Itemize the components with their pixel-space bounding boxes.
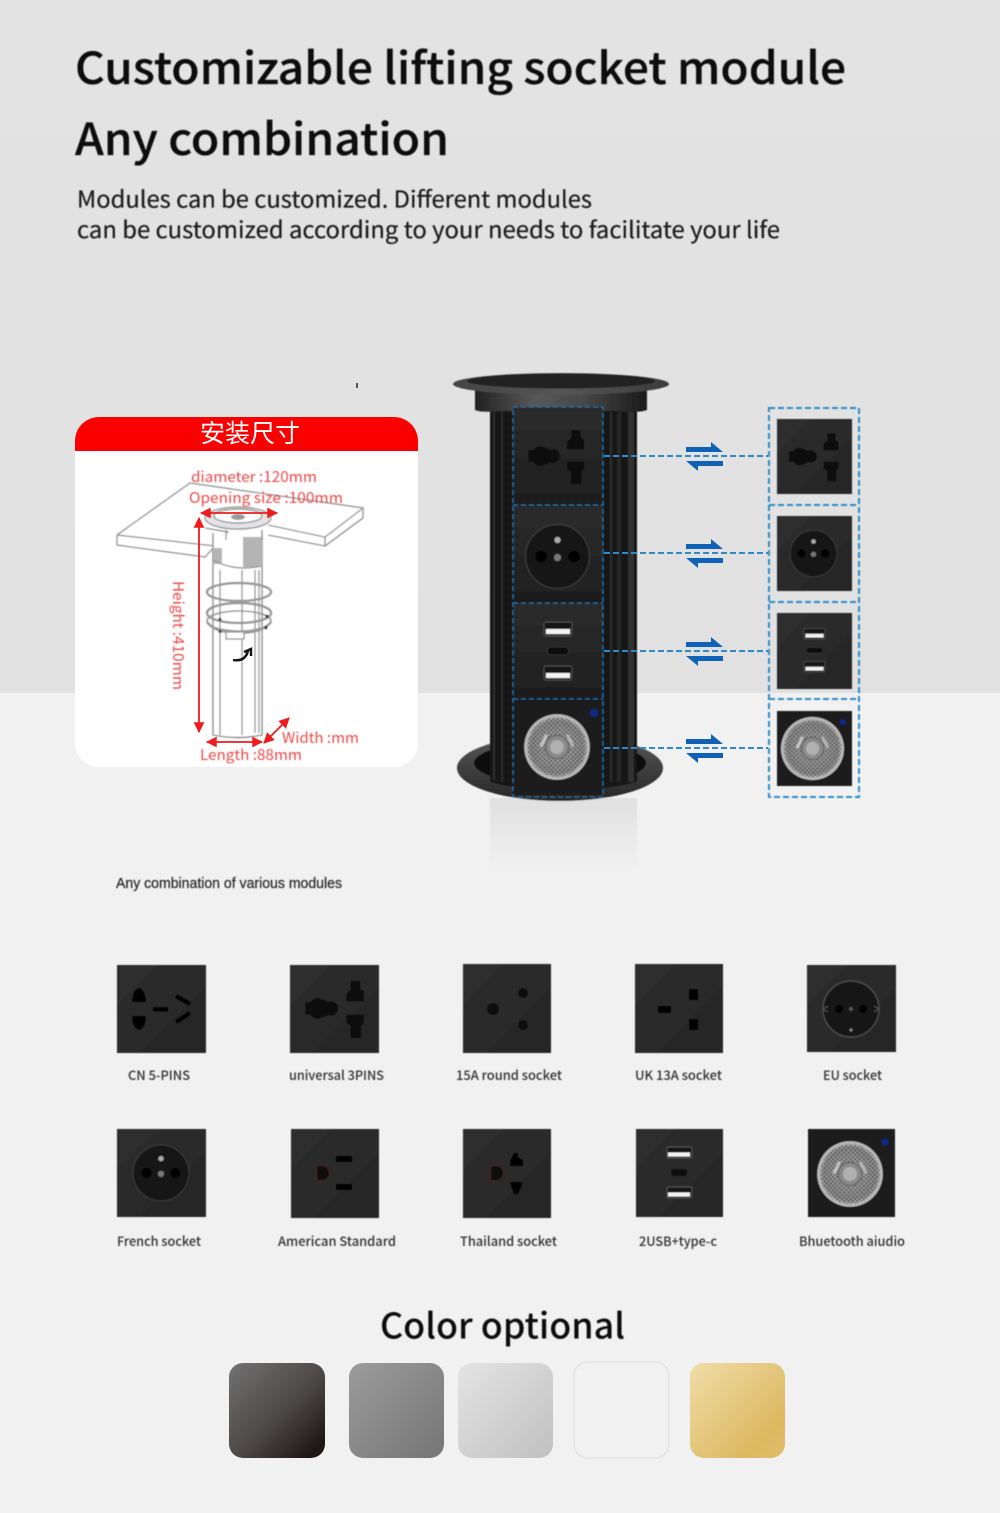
module: CN 5-PINS — [117, 965, 206, 1053]
panel header: red bar: 安装尺寸 — [200, 420, 300, 448]
swatch: mid grey — [349, 1363, 444, 1458]
heading: color optional: Color optional — [380, 1298, 625, 1350]
title: Any combination — [75, 104, 449, 168]
subtitle text block: Modules can be customized. Different modules — [77, 180, 592, 214]
module labels: 15A round socket — [456, 1065, 562, 1084]
width arrow — [264, 718, 289, 743]
module labels: Thailand socket — [460, 1231, 557, 1250]
module 1: universal socket — [513, 407, 603, 505]
module 3: USB and type-C — [513, 603, 603, 699]
module labels: Bhuetooth aiudio — [799, 1231, 905, 1250]
module labels: French socket — [117, 1231, 201, 1250]
thumbnail: French socket — [777, 516, 852, 591]
swatch: dark grey — [229, 1363, 325, 1458]
title — [75, 33, 846, 168]
dimension labels: diameter :120mm — [191, 466, 317, 487]
swatch: gold — [690, 1363, 785, 1458]
module labels: 2USB+type-c — [639, 1231, 717, 1250]
dimension labels: Length :88mm — [200, 744, 302, 765]
colour swatches — [229, 1362, 785, 1458]
module: French socket — [117, 1129, 206, 1217]
dimension labels: Width :mm — [282, 727, 359, 748]
dashed outline of tower modules — [513, 407, 603, 797]
module labels — [117, 1065, 905, 1250]
small dark tick mark — [356, 383, 358, 388]
dashed module frames — [769, 408, 859, 797]
swatch: silver — [458, 1363, 553, 1458]
dimension labels: Opening size :100mm — [189, 487, 343, 508]
arrow pair 3 — [686, 637, 723, 666]
icon: black rotate arrow on column — [233, 649, 251, 660]
module 2: French socket — [513, 505, 603, 603]
module 4: Bluetooth speaker — [513, 699, 603, 795]
module labels: EU socket — [823, 1065, 882, 1084]
arrow pair 2 — [686, 539, 723, 568]
swatch: white — [574, 1362, 669, 1458]
collar and top flange — [453, 373, 669, 412]
module labels: CN 5-PINS — [128, 1065, 190, 1084]
connector lines with exchange arrows — [604, 442, 768, 763]
module grid — [117, 964, 905, 1250]
subtitle text block: can be customized according to your needs to facilitate your life — [77, 211, 780, 245]
diagram: table top with lifting socket column — [117, 483, 363, 738]
module: UK 13A socket — [635, 964, 723, 1053]
module: universal 3PINS — [290, 965, 379, 1053]
height arrow — [198, 518, 200, 732]
thumbnail: Bluetooth speaker — [777, 711, 852, 786]
module: 2USB+type-c — [636, 1129, 723, 1217]
arrow pair 1 — [686, 442, 723, 471]
panel: installation dimensions — [75, 417, 418, 767]
dimension labels: Height :410mm — [168, 581, 189, 690]
column body with grooves — [490, 405, 637, 791]
section caption: Any combination of various modules — [116, 876, 342, 892]
product: lifting socket tower — [453, 373, 669, 870]
module labels: UK 13A socket — [635, 1065, 722, 1084]
dimension labels — [168, 466, 359, 765]
module: American Standard — [291, 1129, 379, 1218]
module: 15A round socket — [463, 964, 551, 1053]
subtitle text block — [77, 180, 780, 245]
thumbnail: USB and type-C — [777, 613, 852, 689]
panel card background — [75, 417, 418, 767]
replacement modules column — [769, 408, 859, 797]
thumbnail: universal socket — [777, 419, 852, 494]
module: Bluetooth audio — [808, 1129, 895, 1217]
title: Customizable lifting socket module — [75, 33, 846, 97]
column reflection — [490, 798, 637, 870]
dashed connector lines — [604, 456, 768, 748]
base ring — [457, 735, 663, 801]
arrow pair 4 — [686, 734, 723, 763]
panel header: red bar — [75, 417, 418, 451]
module labels: American Standard — [278, 1231, 396, 1250]
module labels: universal 3PINS — [289, 1065, 384, 1084]
module: Thailand socket — [463, 1129, 551, 1218]
diameter arrow — [201, 512, 277, 514]
length arrow — [207, 741, 262, 743]
module: EU socket — [807, 965, 896, 1052]
